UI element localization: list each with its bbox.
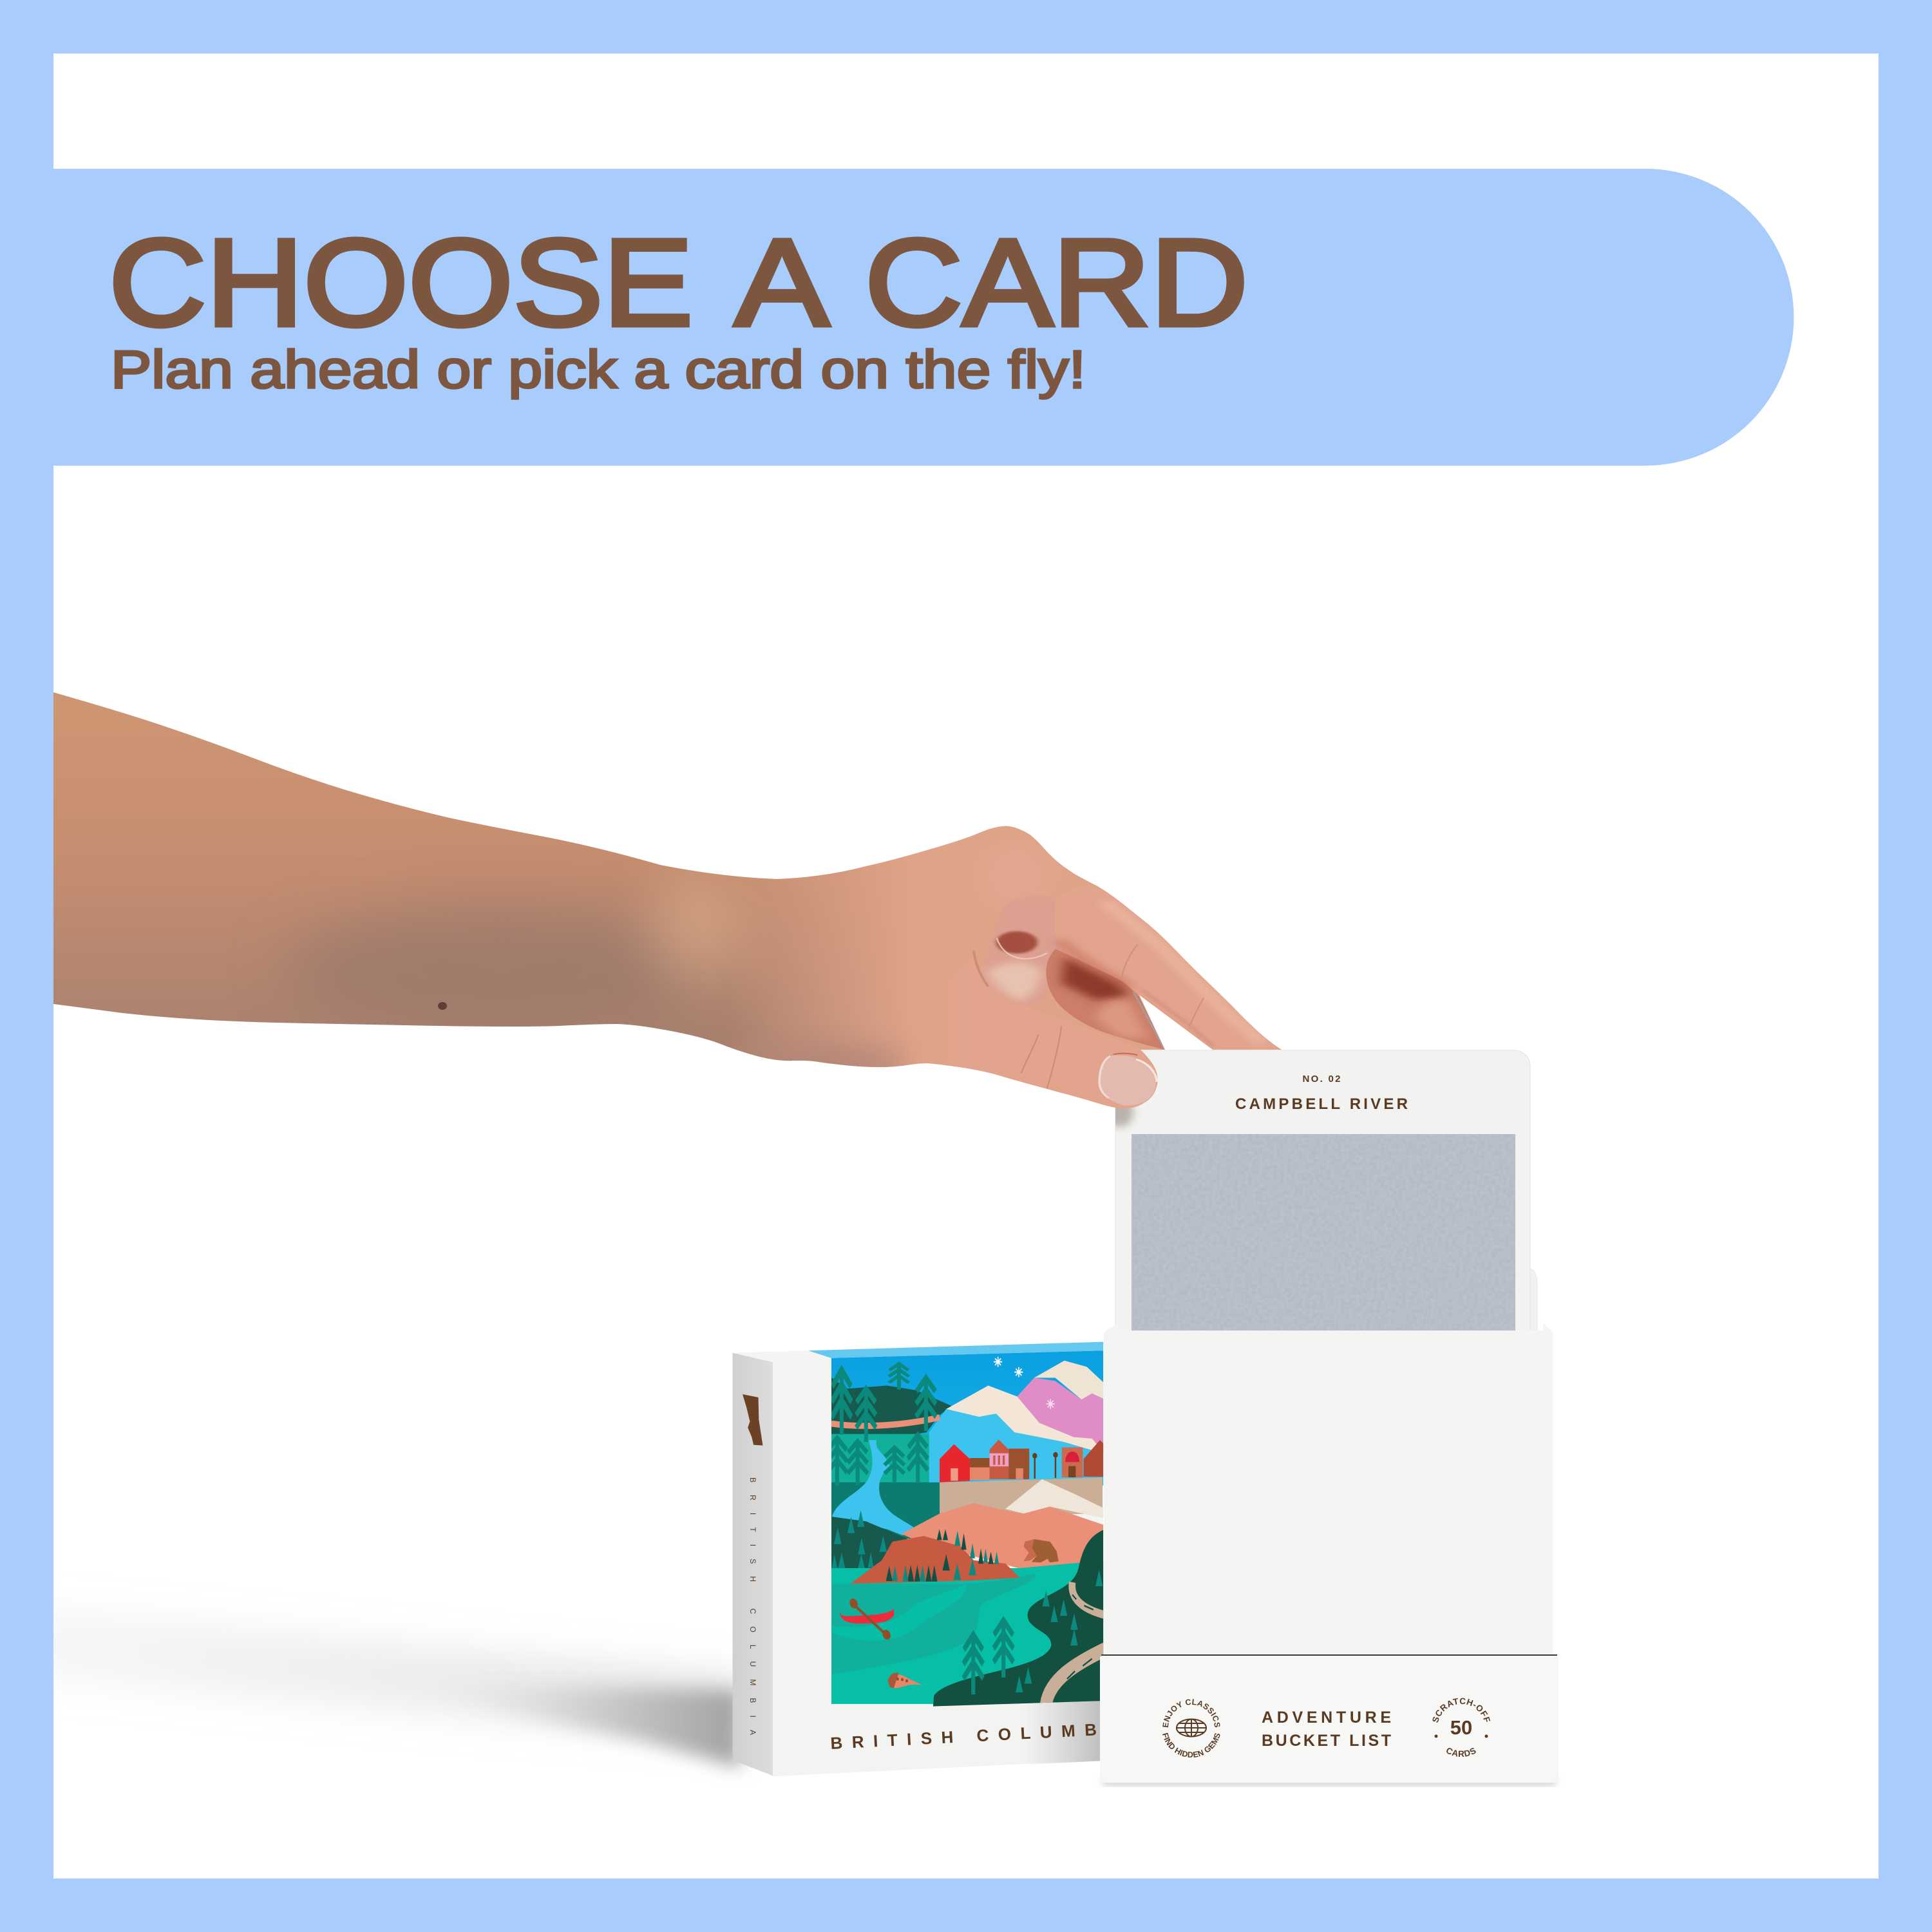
gap between fingers — [1139, 995, 1213, 1050]
round badge: enjoy classics: ENJOY CLASSICS — [1162, 1699, 1220, 1727]
product box: British Columbia — [733, 1342, 1105, 1776]
thumb shadow on card — [1115, 1106, 1137, 1131]
pocket base band — [1100, 1654, 1558, 1787]
round badge: 50 cards: 50 — [1450, 1716, 1472, 1739]
index finger — [1071, 894, 1162, 992]
hand details — [909, 839, 1282, 1112]
band title: ADVENTURE — [1262, 1709, 1391, 1727]
round badge: 50 cards: SCRATCH-OFF — [1432, 1698, 1490, 1723]
floor shadow — [53, 1629, 748, 1776]
wrist highlight — [654, 873, 744, 982]
hand and arm — [52, 683, 1288, 1121]
scratch-off panel — [1132, 1134, 1515, 1335]
spine text: BRITISH COLUMBIA — [748, 1477, 757, 1735]
box front label: BRITISH COLUMB — [830, 1719, 1097, 1753]
card number: NO. 02 — [1302, 1074, 1341, 1084]
band title — [1262, 1709, 1391, 1750]
title: A — [735, 213, 829, 352]
round badge: enjoy classics — [1162, 1699, 1220, 1757]
band title: BUCKET LIST — [1262, 1732, 1391, 1750]
title: CARD — [865, 213, 1248, 352]
card place name: CAMPBELL RIVER — [1235, 1095, 1408, 1113]
round badge: enjoy classics: FIND HIDDEN GEMS — [1162, 1732, 1220, 1757]
title: CHOOSE — [109, 213, 693, 352]
thumb — [953, 1066, 1158, 1108]
scratch card — [1105, 1050, 1530, 1336]
box spine — [733, 1342, 1103, 1776]
arm shadow area — [283, 908, 721, 1030]
card pocket — [1104, 1323, 1553, 1658]
middle finger — [1046, 949, 1165, 1050]
box illustration — [827, 1348, 1105, 1707]
round badge: 50 cards: CARDS — [1446, 1748, 1476, 1757]
arm mole — [438, 1002, 447, 1010]
round badge: 50 cards — [1432, 1698, 1490, 1757]
thumb nail — [1099, 1056, 1156, 1106]
subtitle: Plan ahead or pick a card on the fly! — [111, 339, 1086, 399]
palm hollow — [982, 896, 1061, 1006]
heading banner — [53, 169, 1794, 466]
back card sliver — [1529, 1269, 1537, 1333]
